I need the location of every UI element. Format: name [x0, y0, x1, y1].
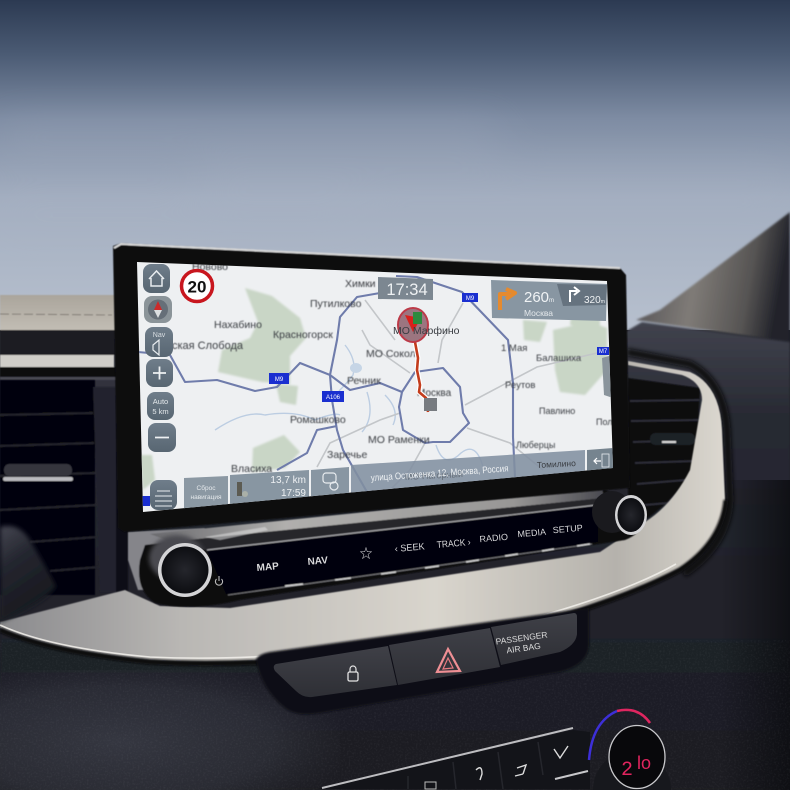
side buttons	[143, 264, 177, 510]
temperature dial: lo	[637, 753, 651, 773]
passenger air bag button: PASSENGER	[495, 629, 548, 647]
map town labels: Химки	[345, 278, 376, 290]
road shields: A106	[326, 395, 341, 401]
clock box: 17:34	[386, 281, 428, 299]
right trim outer shadow	[627, 352, 730, 574]
map town labels: Реутов	[505, 380, 535, 391]
auto zoom button: Auto	[153, 397, 168, 406]
passenger air bag button	[491, 613, 577, 665]
leather grain texture	[0, 665, 720, 790]
passenger air bag button: AIR BAG	[506, 641, 541, 655]
navigation map	[137, 261, 617, 512]
road shields	[140, 293, 609, 506]
map town labels: Власиха	[231, 463, 272, 475]
road shields: M7	[599, 349, 608, 355]
radio button: RADIO	[479, 532, 508, 544]
map town labels: Павлино	[539, 406, 575, 416]
map town labels: Путилково	[310, 298, 362, 310]
road shields: M9	[275, 377, 284, 383]
bottom bar: street address	[351, 450, 585, 494]
route line	[415, 342, 428, 412]
next turn panel: 320m	[584, 295, 605, 306]
map button: MAP	[256, 561, 280, 574]
map town labels: Люберцы	[516, 440, 555, 450]
control panel housing	[128, 488, 646, 607]
bottom bar: reset navigation	[184, 476, 228, 510]
nav sound button: Nav	[153, 332, 166, 339]
map town labels: Нахабино	[214, 319, 262, 331]
left air vent	[0, 380, 128, 595]
current position marker	[393, 308, 460, 342]
black button panel	[207, 506, 598, 594]
bottom bar: street address: улица Остоженка 12, Москва, Россия	[370, 463, 509, 484]
temperature dial	[589, 710, 671, 790]
bottom bar: reset navigation: Сброс	[197, 484, 216, 492]
map town labels: 1 Мая	[501, 343, 527, 354]
bottom bar: trip info: 13,7 km	[270, 475, 306, 486]
zoom in button	[146, 359, 173, 387]
button dividers	[228, 544, 592, 595]
star button: ☆	[359, 546, 373, 561]
map town labels: Речник	[347, 375, 381, 387]
nav sound button	[145, 327, 173, 357]
climate button row	[318, 728, 590, 789]
right side shadow	[720, 480, 790, 790]
map town labels: Москва	[417, 388, 452, 399]
next turn panel: Москва	[524, 308, 553, 318]
zoom out button	[148, 423, 176, 452]
map town labels: Полт	[596, 417, 617, 427]
temperature dial: 2	[621, 759, 633, 782]
bottom bar: reset navigation: навигация	[190, 494, 222, 501]
left grey knob shoulder	[128, 528, 205, 590]
map town labels: МО Раменки	[368, 434, 430, 446]
bottom bar: traffic button	[311, 467, 349, 497]
lock button	[274, 646, 397, 697]
map town labels: Ромашково	[290, 414, 346, 426]
map motorways	[138, 276, 515, 492]
trim highlight	[0, 564, 676, 658]
left vent column	[93, 387, 125, 592]
clock box	[378, 277, 433, 300]
icon: power	[215, 576, 223, 585]
right edge tab	[602, 356, 611, 398]
hazard button group recess	[256, 608, 589, 714]
next turn panel	[491, 280, 607, 321]
auto zoom button: 5 km	[152, 407, 169, 416]
road shields: M9	[466, 296, 475, 302]
control panel labels	[256, 523, 583, 574]
auto zoom button	[147, 392, 174, 420]
right tune knob	[592, 491, 647, 535]
right vent knob	[650, 433, 695, 445]
next turn panel: 260m	[524, 289, 554, 306]
menu button	[150, 480, 177, 510]
chrome band under screen	[150, 488, 604, 542]
hazard button	[389, 628, 500, 685]
speed limit sign	[182, 270, 212, 302]
bottom bar: trip info	[230, 470, 309, 505]
bottom bar: exit button	[587, 448, 613, 472]
map town labels: Дарская Слобода	[152, 340, 244, 352]
lower left dashboard panel	[0, 670, 340, 790]
seek button: ‹ SEEK	[394, 541, 426, 555]
map town labels: МО Сокол	[366, 348, 416, 360]
silver trim band around vents	[0, 361, 725, 661]
destination checker flag	[424, 398, 437, 411]
map town labels: Балашиха	[536, 353, 582, 364]
map town labels: Красногорск	[273, 329, 333, 341]
lower dashboard body	[0, 322, 790, 790]
map grey roads	[317, 300, 597, 495]
bottom bar: trip info: 17:59	[281, 488, 306, 499]
left beige dash top	[0, 295, 125, 380]
trim lower shadow	[0, 500, 726, 663]
current position marker: МО Марфино	[393, 325, 460, 337]
bottom bar: street address: МО Нагорный	[405, 469, 463, 482]
map town labels: Заречье	[327, 449, 367, 461]
right windshield pillar	[636, 212, 790, 342]
map water	[215, 345, 483, 467]
left gear shape in the foreground	[0, 526, 56, 622]
map forests	[140, 288, 607, 490]
right air vent	[628, 378, 700, 520]
home button	[143, 264, 170, 293]
sky background	[0, 0, 790, 330]
track button: TRACK ›	[436, 537, 471, 551]
left vent knob	[3, 464, 73, 481]
compass button	[144, 296, 172, 323]
map town labels: Новово	[192, 261, 228, 273]
media button: MEDIA	[517, 527, 546, 539]
bottom bar: street address: Томилино	[537, 458, 576, 470]
speed limit sign: 20	[188, 278, 206, 296]
nav button: NAV	[307, 555, 329, 568]
left volume knob	[149, 535, 212, 597]
screen bezel	[113, 243, 630, 532]
map town labels	[152, 261, 617, 475]
setup button: SETUP	[552, 523, 583, 535]
